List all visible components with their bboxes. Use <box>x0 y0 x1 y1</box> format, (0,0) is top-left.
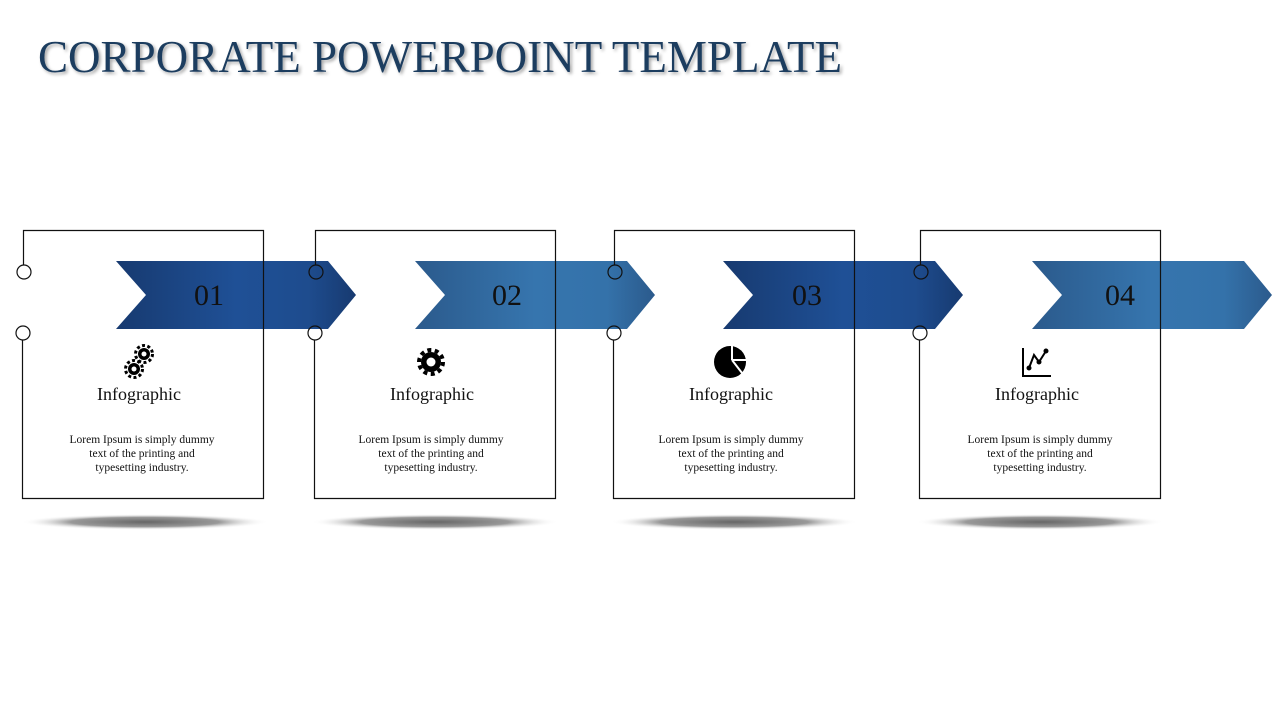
box 4 <box>913 230 1160 498</box>
body text: text of the printing and <box>987 448 1093 460</box>
labels <box>97 384 1079 404</box>
body text: typesetting industry. <box>684 462 778 474</box>
box 3 <box>607 230 854 498</box>
icon: pie chart <box>714 346 746 378</box>
arrow 03: 03 <box>792 279 822 312</box>
labels: Infographic <box>995 384 1079 404</box>
body text: typesetting industry. <box>384 462 478 474</box>
body text: typesetting industry. <box>993 462 1087 474</box>
body text <box>69 434 1113 474</box>
labels: Infographic <box>390 384 474 404</box>
arrow 01: 01 <box>194 279 224 312</box>
icon: line chart <box>1023 348 1051 376</box>
arrow 04: 04 <box>1105 279 1135 312</box>
labels: Infographic <box>97 384 181 404</box>
icon: gears <box>126 346 152 378</box>
arrow 01 <box>116 261 356 329</box>
box 2 <box>308 230 556 498</box>
box 1 <box>16 230 264 498</box>
body text: typesetting industry. <box>95 462 189 474</box>
shadows <box>21 514 1164 530</box>
arrow 02 <box>415 261 655 329</box>
body text: Lorem Ipsum is simply dummy <box>69 434 215 446</box>
icon: gear <box>419 350 443 374</box>
body text: Lorem Ipsum is simply dummy <box>658 434 804 446</box>
body text: text of the printing and <box>89 448 195 460</box>
arrow 02: 02 <box>492 279 522 312</box>
labels: Infographic <box>689 384 773 404</box>
arrow 04 <box>1032 261 1272 329</box>
body text: text of the printing and <box>378 448 484 460</box>
body text: Lorem Ipsum is simply dummy <box>967 434 1113 446</box>
body text: text of the printing and <box>678 448 784 460</box>
body text: Lorem Ipsum is simply dummy <box>358 434 504 446</box>
arrow 03 <box>723 261 963 329</box>
title: CORPORATE POWERPOINT TEMPLATE <box>38 31 842 82</box>
